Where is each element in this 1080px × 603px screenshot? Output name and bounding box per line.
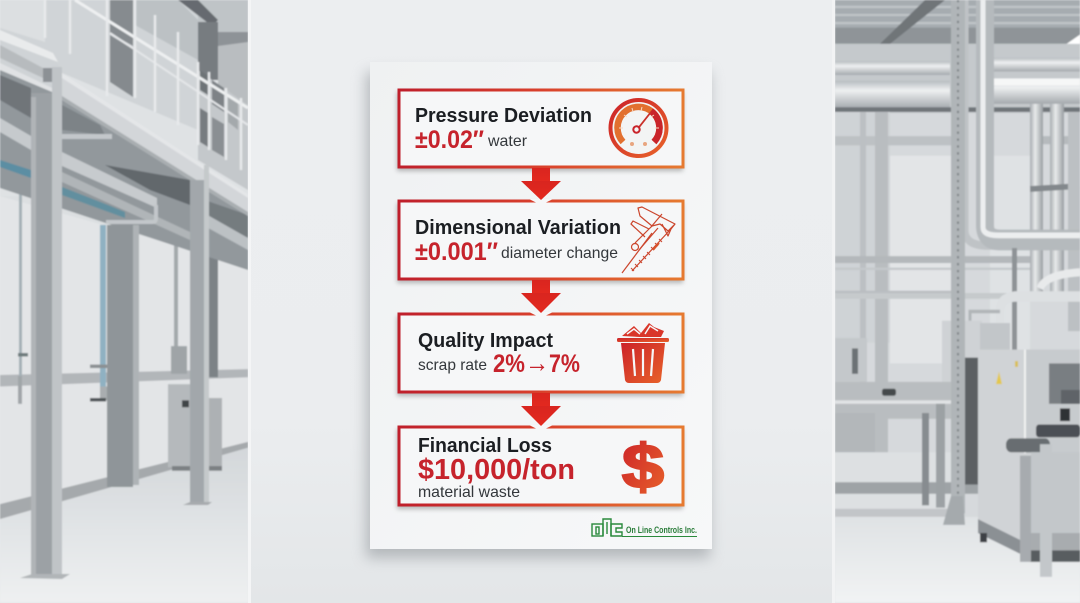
main beams [62, 73, 248, 216]
value: 2% [493, 350, 525, 378]
perforated rack column [951, 0, 965, 513]
arrow: quality to financial [521, 393, 561, 431]
large machine [965, 358, 980, 485]
machine legs and frame [1031, 452, 1080, 533]
card: quality impact [397, 314, 683, 396]
dark railing panes [110, 0, 133, 46]
arrow: pressure to dimension [521, 168, 561, 205]
background: right factory piping [835, 0, 1080, 602]
conveyor table [835, 382, 951, 419]
poster shadow [366, 72, 710, 558]
value [493, 347, 580, 378]
icon: caliper [622, 207, 675, 273]
ceiling [835, 0, 1080, 28]
heading: Financial Loss [418, 435, 552, 457]
logo: On Line Controls [592, 519, 697, 536]
background: left factory mezzanine [0, 0, 248, 602]
unit: water [487, 133, 528, 150]
description: scrap rate [418, 357, 487, 374]
heading: Pressure Deviation [415, 105, 592, 127]
back wall [890, 156, 951, 363]
floor [835, 452, 889, 460]
card: pressure deviation [397, 90, 683, 171]
value: → [525, 347, 549, 378]
upper wall and ceiling [0, 0, 198, 130]
description: material waste [418, 484, 520, 501]
panel: poster [370, 62, 712, 549]
card: dimensional variation [397, 201, 683, 283]
description: diameter change [501, 245, 618, 262]
railing rails [75, 0, 248, 108]
back machinery [942, 320, 972, 364]
icon: pressure gauge [610, 100, 666, 156]
card: financial loss [397, 427, 683, 509]
value: ±0.02″ [415, 126, 484, 154]
low pipes [1000, 290, 1080, 303]
value: ±0.001″ [415, 238, 498, 266]
vertical chimney pipes [1030, 104, 1043, 300]
arrow: dimension to quality [521, 280, 561, 318]
icon: dollar sign: $ [622, 433, 664, 502]
underside of mezzanine [0, 70, 248, 270]
heading: Dimensional Variation [415, 217, 621, 239]
icon: scrap bin [617, 323, 669, 383]
upper pipes [835, 44, 1080, 113]
value: 7% [549, 350, 580, 378]
front column [31, 93, 52, 577]
second column [190, 180, 204, 503]
central wall panel [248, 0, 835, 603]
heading: Quality Impact [418, 330, 553, 352]
logo: On Line Controls: On Line Controls Inc. [626, 525, 697, 535]
value: $10,000/ton [418, 454, 575, 486]
rear column [107, 225, 133, 487]
big elbow pipe [964, 0, 992, 250]
